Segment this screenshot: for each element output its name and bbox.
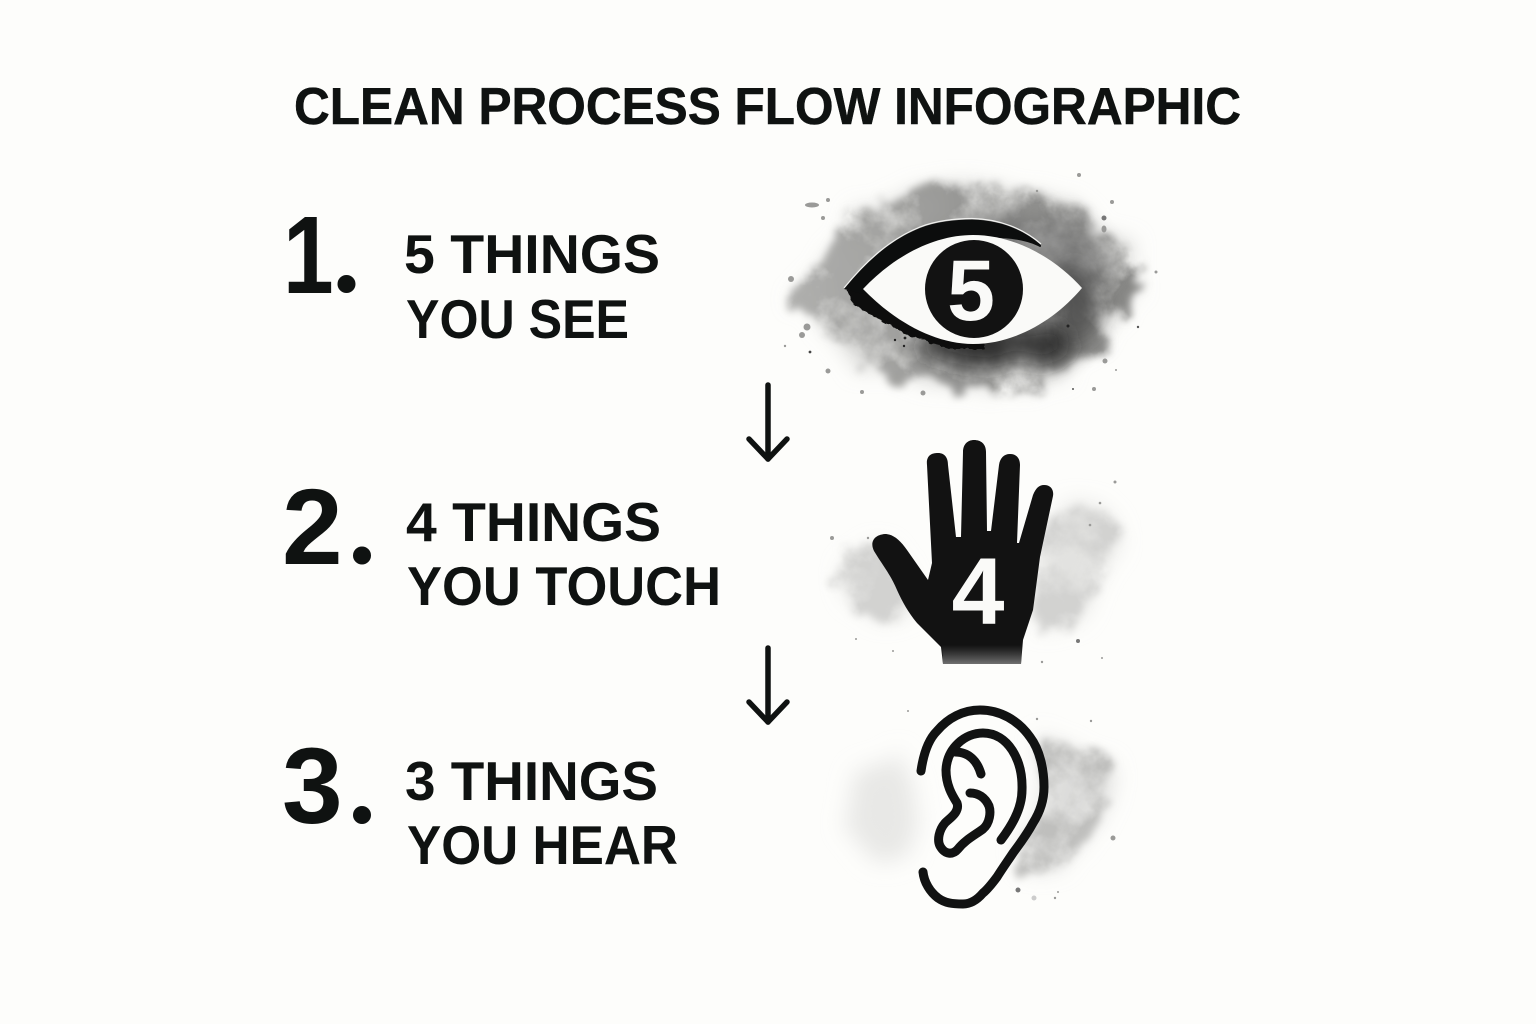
step number 3: 3.: [282, 725, 373, 846]
icon: ear on ink wash: [852, 710, 1116, 904]
ink wash behind eye: [785, 178, 1145, 392]
number 5 in pupil: 5: [947, 243, 995, 339]
ink wash behind hand: [835, 500, 1120, 632]
eye white: [863, 235, 1082, 344]
step 2 label: 4 THINGS: [406, 491, 661, 553]
worn wrist texture: [942, 645, 1022, 664]
step number 1: 1.: [283, 194, 359, 317]
eye lower-left rough ink band: [846, 285, 985, 349]
step 1 label: 5 THINGS: [404, 223, 660, 285]
step 1 label: YOU SEE: [406, 288, 629, 350]
eye upper lid and brow: [844, 220, 1041, 294]
icon: hand with number 4 on ink wash: [830, 440, 1120, 664]
ear outline strokes: [921, 710, 1044, 904]
arrow: step 1 to step 2: [749, 385, 787, 459]
title: CLEAN PROCESS FLOW INFOGRAPHIC: [294, 78, 1241, 136]
number 4 on palm: 4: [952, 539, 1005, 645]
step 1: 5 things you see: [283, 194, 660, 350]
ink wash behind ear: [852, 735, 1112, 875]
step 2 label: YOU TOUCH: [407, 555, 721, 617]
splatter around hand: [830, 480, 1116, 663]
step 2: 4 things you touch: [282, 466, 721, 617]
step 3 label: YOU HEAR: [407, 814, 678, 876]
splatter around eye: [784, 173, 1158, 396]
icon: eye with number 5 on ink wash: [784, 173, 1158, 396]
step number 2: 2.: [282, 466, 373, 587]
splatter around ear: [907, 710, 1116, 900]
hand silhouette: [872, 440, 1053, 664]
step 3 label: [405, 750, 678, 876]
step 3: 3 things you hear: [282, 725, 678, 876]
arrow: step 2 to step 3: [749, 648, 787, 722]
pupil: [925, 240, 1023, 338]
step 2 label: [406, 491, 721, 617]
step 1 label: [404, 223, 660, 350]
light halo along upper lid: [844, 218, 1041, 288]
step 3 label: 3 THINGS: [405, 750, 658, 812]
